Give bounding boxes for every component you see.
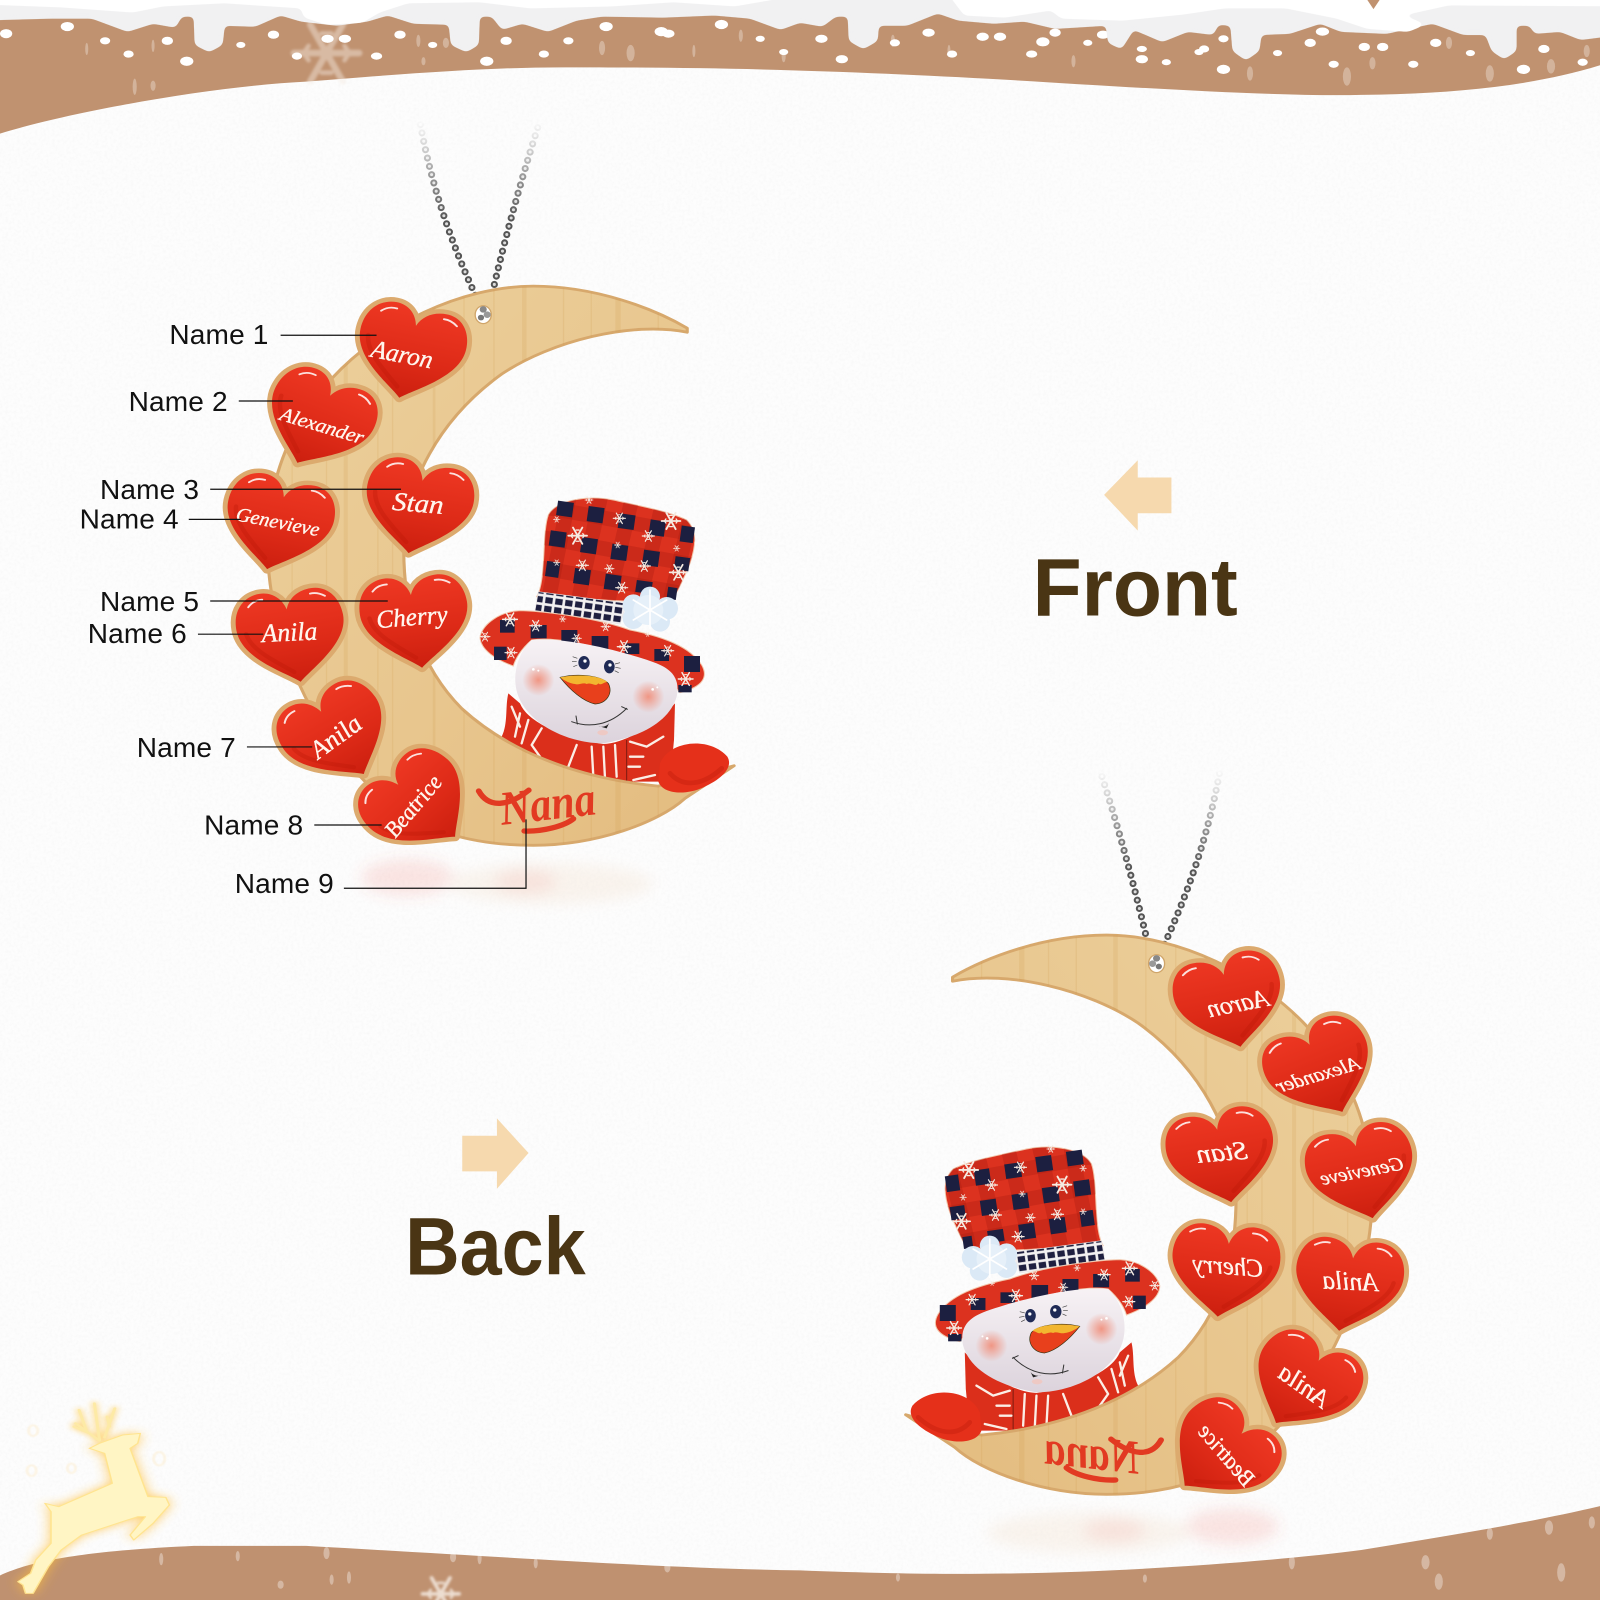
label: Name 5: Name 5 xyxy=(100,586,199,617)
heart: Anila: Anila xyxy=(259,617,318,648)
heart: Beatrice xyxy=(1146,1385,1295,1520)
heart: Stan xyxy=(356,453,480,562)
icing drips xyxy=(0,0,1600,60)
heart: Aaron: Aaron xyxy=(1204,983,1273,1023)
snowman figure xyxy=(480,493,704,782)
heart: Genevieve: Genevieve xyxy=(1318,1153,1406,1190)
heart: Alexander: Alexander xyxy=(1272,1053,1365,1098)
heart: Anila xyxy=(1285,1230,1410,1339)
label: Name 2: Name 2 xyxy=(129,386,228,417)
Nana text xyxy=(479,772,599,835)
label: Name 1: Name 1 xyxy=(169,319,268,350)
label: Name 7: Name 7 xyxy=(137,732,236,763)
heart: Anila lower xyxy=(264,669,410,800)
heart: Stan: Stan xyxy=(1195,1136,1249,1169)
Nana text: Nana xyxy=(1041,1421,1144,1484)
snowman figure xyxy=(935,1142,1160,1431)
Nana text xyxy=(1041,1421,1161,1484)
heart: Anila lower: Anila xyxy=(1272,1358,1338,1414)
small brown pennant xyxy=(1367,0,1380,9)
label: Name 6: Name 6 xyxy=(88,618,187,649)
top snowy band xyxy=(0,0,1600,134)
heart: Beatrice: Beatrice xyxy=(378,770,448,842)
heading: Front: Front xyxy=(1033,542,1238,633)
chain xyxy=(420,124,538,304)
name labels with leader lines xyxy=(80,319,526,899)
label: Name 4: Name 4 xyxy=(80,504,179,535)
heart: Genevieve xyxy=(1298,1117,1425,1229)
label: Name 8: Name 8 xyxy=(204,810,303,841)
heart: Anila xyxy=(230,581,354,690)
mitten xyxy=(911,1393,981,1442)
wood crescent xyxy=(268,280,734,851)
label: Name 9: Name 9 xyxy=(235,868,334,899)
icon: glowing reindeer xyxy=(18,1403,169,1593)
heart: Anila: Anila xyxy=(1322,1266,1381,1297)
heart: Alexander xyxy=(1251,1007,1391,1132)
arrow: back pointing right xyxy=(462,1118,529,1189)
bottom band xyxy=(0,1506,1600,1600)
heading: Back: Back xyxy=(405,1201,586,1292)
Nana text: Nana xyxy=(495,772,599,835)
heart: Alexander xyxy=(248,358,389,483)
heart: Aaron xyxy=(1166,946,1293,1057)
heart: Stan xyxy=(1160,1102,1284,1211)
heart: Genevieve: Genevieve xyxy=(234,504,322,541)
heart: Cherry: Cherry xyxy=(1191,1249,1265,1283)
mitten xyxy=(658,744,729,793)
heart: Beatrice: Beatrice xyxy=(1192,1419,1262,1491)
heart: Beatrice xyxy=(345,736,494,871)
heart: Anila lower: Anila xyxy=(301,709,368,765)
label: Name 3: Name 3 xyxy=(100,474,199,505)
arrow: front pointing left xyxy=(1104,460,1171,531)
heart: Stan: Stan xyxy=(391,487,445,520)
heart: Anila lower xyxy=(1230,1318,1375,1449)
crescent moon with mirrored hearts xyxy=(906,929,1425,1520)
heart: Cherry xyxy=(355,569,476,675)
chain xyxy=(1102,773,1219,953)
white snow cap xyxy=(0,0,1600,32)
reflection under front ornament xyxy=(361,859,653,904)
reflection under back ornament xyxy=(987,1508,1279,1553)
panel: front ornament xyxy=(215,124,734,904)
heart: Genevieve xyxy=(215,468,342,580)
crescent moon with hearts xyxy=(215,280,734,871)
heart: Aaron xyxy=(347,297,474,408)
wood crescent xyxy=(906,929,1372,1500)
heart: Aaron: Aaron xyxy=(366,334,436,374)
heart: Cherry: Cherry xyxy=(375,600,449,634)
heart: Cherry xyxy=(1164,1218,1285,1323)
heart: Alexander: Alexander xyxy=(275,404,368,449)
label: Name 9 xyxy=(235,819,526,899)
panel: back ornament (mirrored) xyxy=(906,773,1425,1553)
